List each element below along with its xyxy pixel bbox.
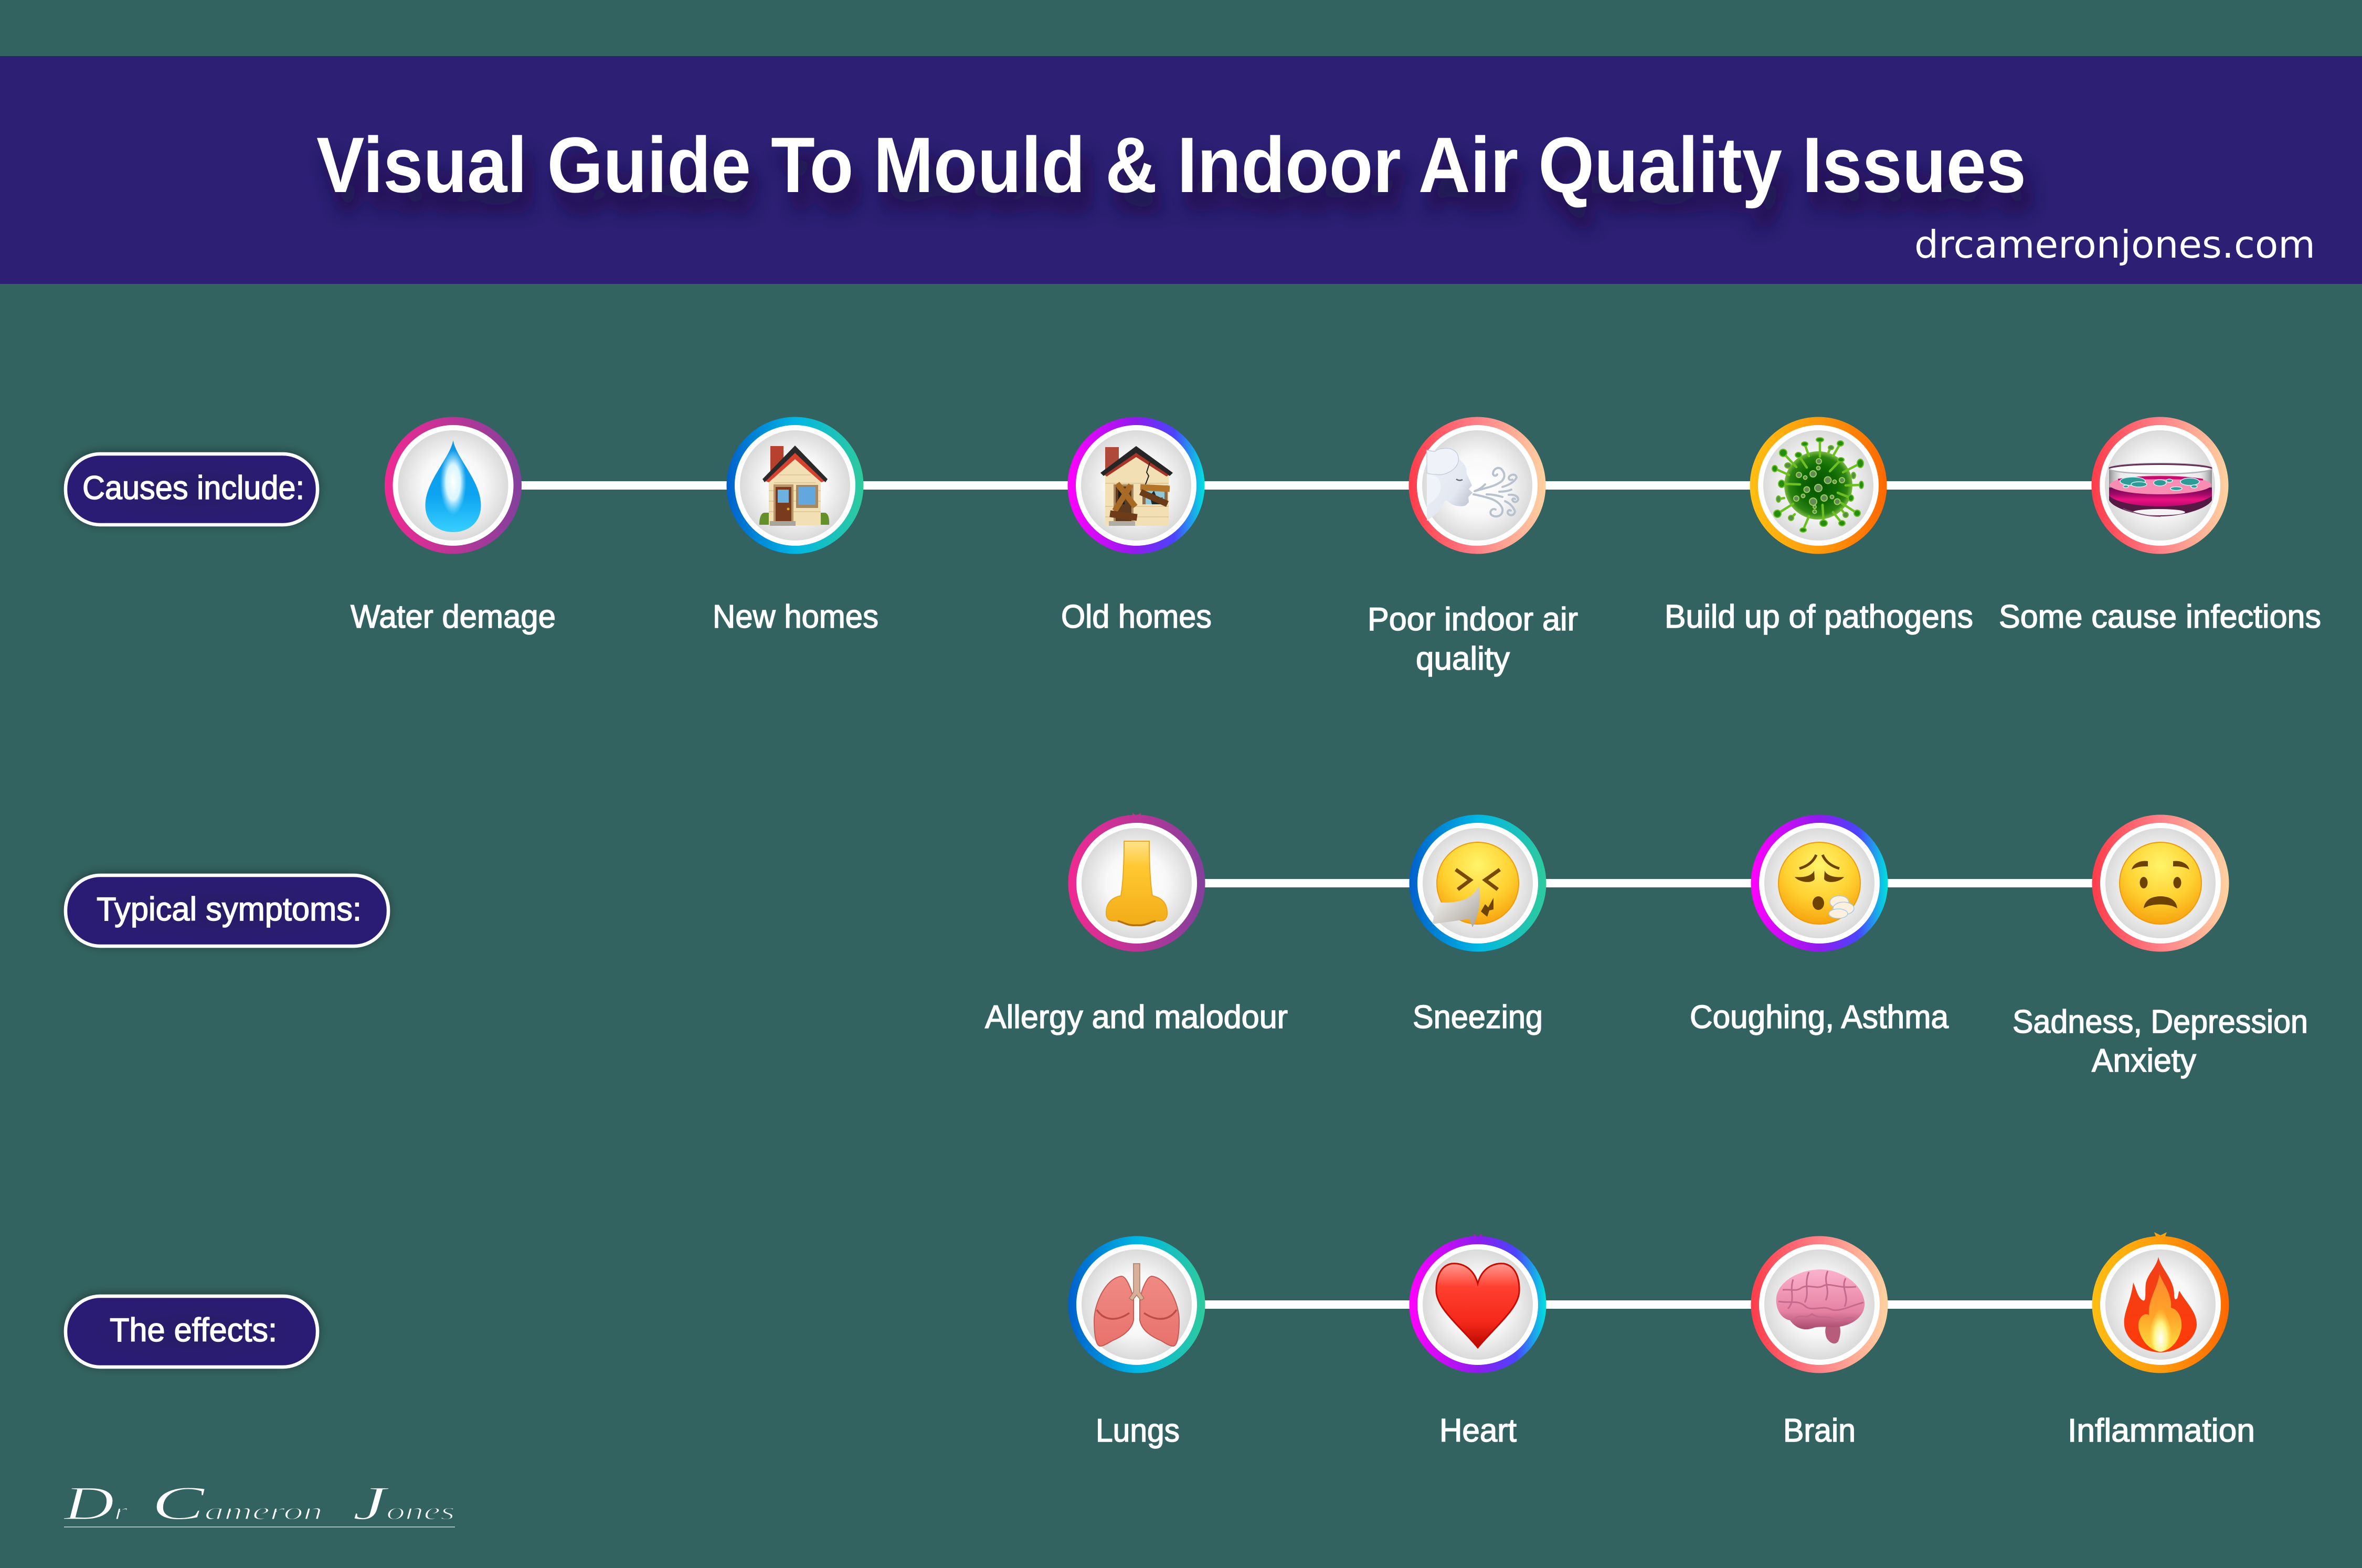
icon: red heart — [1410, 1233, 1546, 1373]
step: some cause infections — [1999, 417, 2321, 635]
label: Brain — [1783, 1413, 1856, 1449]
connector line: causes row — [520, 481, 2094, 490]
icon: brain — [1751, 1236, 1888, 1373]
signature — [62, 1477, 455, 1530]
step: old homes — [1061, 417, 1212, 635]
icon: sad face — [2092, 814, 2229, 952]
label: Heart — [1439, 1413, 1517, 1449]
label: Old homes — [1061, 599, 1212, 635]
label: Build up of pathogens — [1665, 599, 1973, 635]
label: Poor indoor air — [1368, 601, 1578, 638]
step: coughing, asthma — [1690, 814, 1949, 1035]
pill: causes include — [66, 454, 317, 525]
icon: fire — [2092, 1232, 2229, 1373]
label: Lungs — [1096, 1413, 1180, 1449]
label: Coughing, Asthma — [1690, 999, 1949, 1035]
step: brain — [1751, 1236, 1888, 1449]
icon: lungs — [1068, 1236, 1205, 1373]
signature: D r — [62, 1477, 128, 1530]
step: build up of pathogens — [1665, 417, 1973, 635]
label: Sneezing — [1413, 999, 1543, 1035]
icon: derelict house — [1067, 417, 1205, 554]
step: allergy and malodour — [985, 813, 1288, 1035]
connector line: symptoms row — [1202, 879, 2094, 887]
connector line: effects row — [1202, 1300, 2094, 1309]
label: New homes — [713, 599, 878, 635]
label: Some cause infections — [1999, 599, 2321, 635]
pill: the effects — [66, 1296, 317, 1367]
step: new homes — [713, 417, 878, 635]
icon: green virus — [1750, 417, 1887, 554]
label: Inflammation — [2068, 1413, 2255, 1449]
step: lungs — [1068, 1236, 1205, 1449]
icon: blowing face — [1408, 417, 1546, 554]
step: sneezing — [1410, 814, 1546, 1035]
icon: water drop — [385, 417, 522, 554]
step: sadness, depression, anxiety — [2013, 814, 2308, 1079]
header banner — [0, 56, 2362, 284]
icon: house — [726, 417, 864, 554]
title: Visual Guide To Mould & Indoor Air Quality Issues — [316, 121, 2026, 209]
icon: nose — [1068, 813, 1205, 952]
signature: C ameron — [152, 1477, 323, 1530]
pill: causes include: Causes include: — [82, 470, 304, 506]
icon: petri dish — [2092, 417, 2228, 554]
pill: typical symptoms — [66, 875, 388, 946]
icon: sneezing face — [1410, 814, 1546, 952]
step: poor indoor air quality — [1368, 417, 1578, 677]
label line 2: Anxiety — [2092, 1043, 2196, 1079]
label line 2: quality — [1416, 641, 1510, 677]
pill: typical symptoms: Typical symptoms: — [97, 891, 362, 928]
label: Water demage — [351, 599, 556, 635]
step: water damage — [351, 417, 556, 635]
signature: J ones — [353, 1477, 455, 1530]
pill: the effects: The effects: — [110, 1312, 277, 1349]
icon: exhaling face — [1751, 814, 1888, 952]
website: drcameronjones.com — [1914, 223, 2315, 267]
step: heart — [1410, 1233, 1546, 1449]
step: inflammation — [2068, 1232, 2255, 1449]
label: Allergy and malodour — [985, 999, 1288, 1035]
label: Sadness, Depression — [2013, 1004, 2308, 1040]
